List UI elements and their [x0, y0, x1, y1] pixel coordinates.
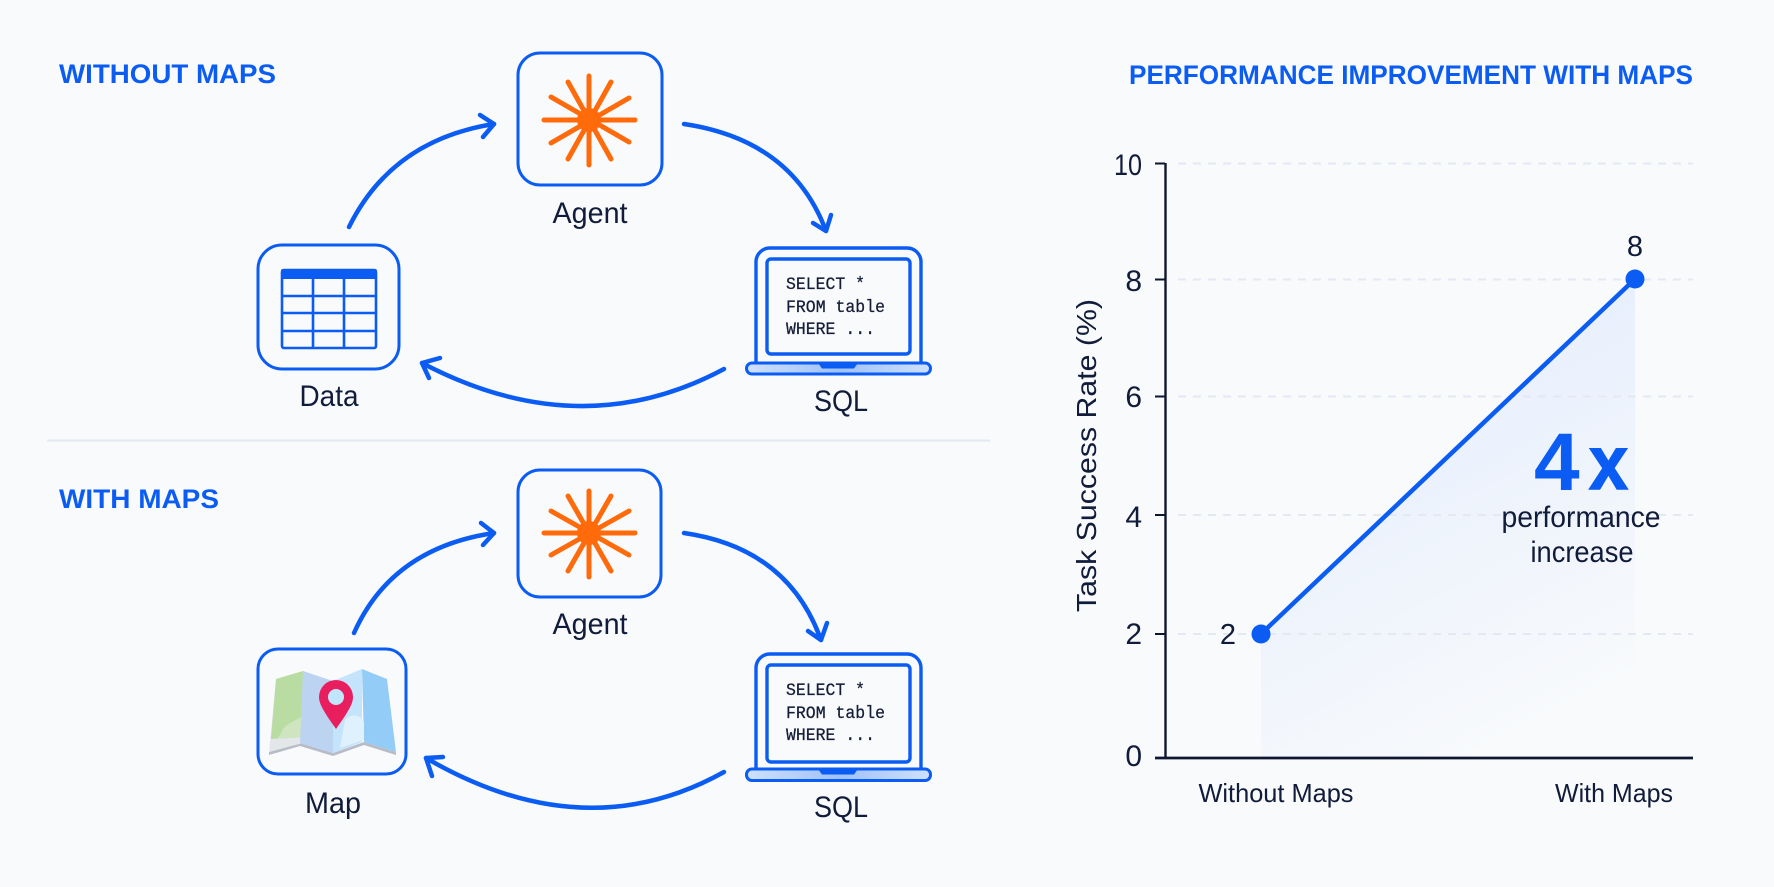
node: agent [518, 470, 661, 641]
sql code: WHERE ... [786, 320, 875, 340]
heading: performance improvement: PERFORMANCE IMPROVEMENT WITH MAPS [1129, 60, 1693, 90]
label: sql: SQL [814, 385, 868, 418]
label: sql: SQL [814, 791, 868, 824]
label: agent: Agent [552, 608, 628, 641]
icon: orange starburst [544, 76, 635, 165]
data line [1261, 279, 1635, 634]
heading: without maps: WITHOUT MAPS [59, 59, 276, 89]
y axis labels: 10 [1114, 149, 1142, 182]
icon: table [281, 269, 377, 348]
y axis labels: 2 [1125, 618, 1142, 651]
callout: 4x performance increase [1502, 417, 1660, 569]
y axis title: Task Success Rate (%) [1071, 299, 1102, 612]
label: agent: Agent [552, 197, 628, 230]
callout: 4x performance increase: 4 [1534, 417, 1580, 508]
panel: without maps loop [59, 53, 930, 418]
x axis labels [1198, 780, 1673, 808]
y axis labels: 4 [1125, 501, 1142, 534]
label: data: Data [300, 380, 359, 413]
point: with maps: 8 [1627, 231, 1643, 263]
heading: with maps: WITH MAPS [59, 484, 219, 514]
arrow: sql to data [422, 358, 724, 406]
axes and ticks [1155, 163, 1693, 758]
y axis labels [1114, 149, 1142, 773]
y axis labels: 0 [1125, 740, 1142, 773]
node: sql laptop [746, 654, 930, 824]
node: agent [518, 53, 662, 230]
panel: performance chart [1071, 60, 1693, 808]
grid lines [1178, 164, 1693, 634]
arrow: data to agent [349, 115, 494, 227]
sql code [786, 275, 885, 340]
arrow: agent to sql [684, 124, 831, 231]
sql code: FROM table [786, 704, 885, 724]
arrow: map to agent [354, 523, 494, 633]
callout: 4x performance increase: increase [1530, 536, 1634, 569]
callout: 4x performance increase: x [1589, 421, 1628, 506]
sql code: WHERE ... [786, 726, 875, 746]
x axis labels: Without Maps [1198, 780, 1354, 808]
node: data [258, 245, 399, 413]
divider [47, 440, 990, 442]
point: without maps: 2 [1220, 619, 1236, 651]
sql code: SELECT * [786, 681, 865, 701]
callout: 4x performance increase: performance [1502, 501, 1660, 534]
node: sql laptop [746, 248, 930, 418]
label: map: Map [305, 787, 361, 820]
node: map [258, 649, 406, 820]
sql code: FROM table [786, 298, 885, 318]
icon: folded map with pin [269, 669, 396, 756]
y axis labels: 6 [1125, 381, 1142, 414]
arrow: agent to sql [684, 533, 827, 640]
x axis labels: With Maps [1555, 780, 1673, 808]
sql code [786, 681, 885, 746]
icon: orange starburst [544, 491, 635, 577]
sql code: SELECT * [786, 275, 865, 295]
point: without maps [1220, 619, 1270, 651]
y axis labels: 8 [1125, 265, 1142, 298]
area fill under line [1261, 279, 1635, 758]
panel: with maps loop [59, 470, 930, 824]
point: with maps [1626, 231, 1644, 288]
arrow: sql to map [426, 757, 724, 808]
